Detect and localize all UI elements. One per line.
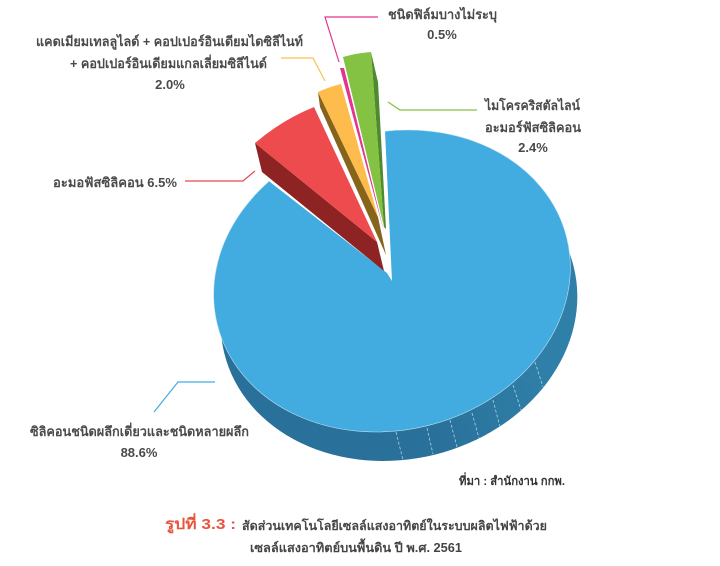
leader line: microcrystalline <box>388 102 477 110</box>
label: microcrystalline <box>483 97 581 155</box>
caption: รูปที่ 3.3 : <box>165 513 236 534</box>
green slice: microcrystalline amorphous silicon 2.4% <box>343 52 386 229</box>
blue slice cut-out <box>200 20 392 281</box>
yellow slice: CdTe CIS CIGS 2.0% <box>318 84 386 255</box>
label: microcrystalline: อะมอร์ฟัสซิลิคอน <box>485 120 581 135</box>
label: microcrystalline: 2.4% <box>518 140 548 155</box>
blue slice: silicon 88.6% <box>181 93 603 469</box>
caption: เซลล์แสงอาทิตย์บนพื้นดิน ปี พ.ศ. 2561 <box>250 538 462 555</box>
label: crystalline silicon <box>30 422 249 460</box>
source note: ที่มา : สำนักงาน กกพ. <box>459 472 565 488</box>
pink slice: unspecified thin film 0.5% <box>340 68 385 236</box>
label: thin film <box>388 6 497 42</box>
label: thin film: 0.5% <box>427 27 457 42</box>
leader line: thin film <box>325 17 378 62</box>
blue side wall segment marks <box>396 362 543 460</box>
red slice: amorphous silicon 6.5% <box>255 107 384 271</box>
caption: สัดส่วนเทคโนโลยีเซลล์แสงอาทิตย์ในระบบผลิตไฟฟ้าด้วย <box>242 518 547 533</box>
label: amorphous silicon: อะมอฟัสซิลิคอน 6.5% <box>53 175 177 190</box>
label: crystalline silicon: 88.6% <box>121 445 158 460</box>
label: CdTe CIS CIGS: + คอปเปอร์อินเดียมแกลเลี่ยมซิลีไนด์ <box>70 54 267 71</box>
blue slice side wall <box>188 122 610 498</box>
leader line: CdTe <box>281 58 325 81</box>
label: CdTe CIS CIGS: แคดเมียมเทลลูไลด์ + คอปเปอร์อินเดียมไดซิลีไนท์ <box>36 33 303 50</box>
label: crystalline silicon: ซิลิคอนชนิดผลึกเดี่ยวและชนิดหลายผลึก <box>30 422 249 439</box>
label: CdTe CIS CIGS <box>36 33 303 92</box>
leader line: amorphous silicon <box>185 171 255 181</box>
label: thin film: ชนิดฟิล์มบางไม่ระบุ <box>388 6 497 23</box>
pie chart: 3D exploded pie <box>181 20 610 498</box>
label: CdTe CIS CIGS: 2.0% <box>155 77 185 92</box>
caption <box>165 513 547 555</box>
label: microcrystalline: ไมโครคริสตัลไลน์ <box>483 97 580 113</box>
leader line: crystalline silicon <box>154 382 215 412</box>
